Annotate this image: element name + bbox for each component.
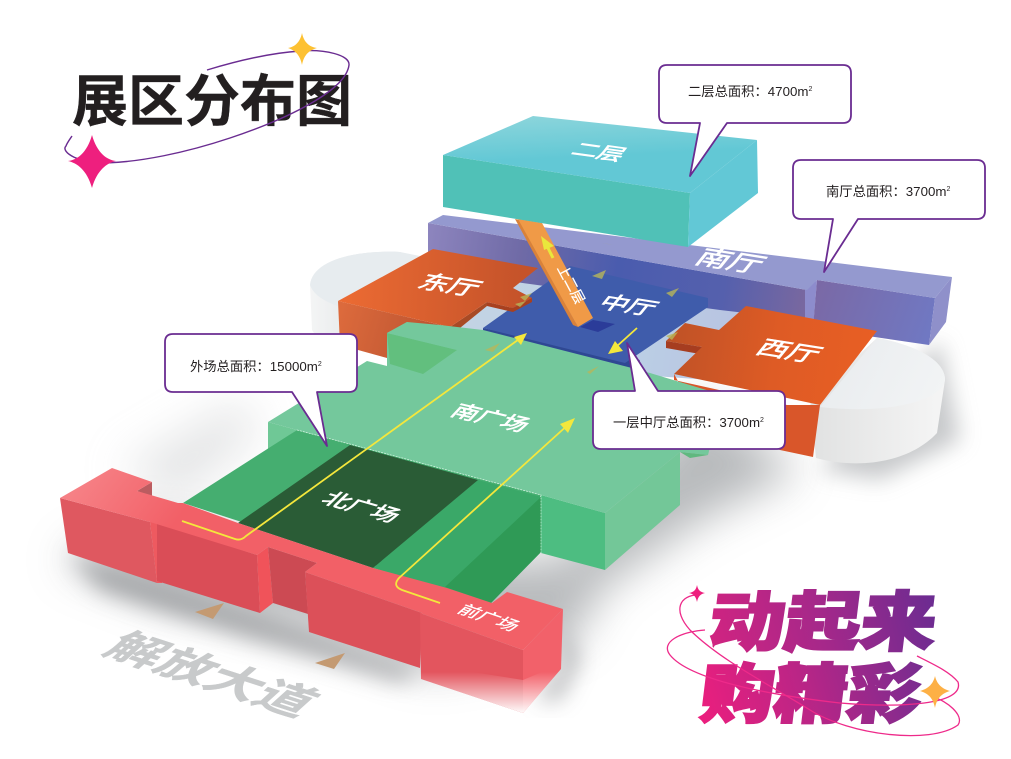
ramp arrow (541, 236, 554, 258)
panel: west hall 西厅 (666, 306, 877, 457)
route to south plaza (396, 423, 570, 603)
panel: red front wall 前广场 (60, 468, 563, 713)
callout: 南厅: 南厅总面积：3700m (826, 184, 946, 199)
callout: 一层中厅: 一层中厅总面积：3700m (613, 415, 760, 430)
callout: 外场: 2 (318, 361, 322, 368)
title 展区分布图: 展区分布图 (72, 57, 352, 138)
slogan line 1: 动起来 (705, 571, 943, 664)
recessed block (387, 333, 457, 374)
route to central hall (182, 337, 522, 540)
label: 中厅: 中厅 (593, 288, 665, 321)
callout: 外场 (165, 334, 357, 446)
callout: 南厅 (793, 160, 985, 272)
entrance markers on road (195, 603, 345, 669)
callout: 一层中厅: 2 (760, 417, 764, 424)
panel: north plaza 北广场 (183, 430, 541, 603)
label: 西厅: 西厅 (750, 331, 831, 368)
route out of central hall (616, 328, 637, 347)
escalator ramp 上二层 (515, 219, 593, 327)
road label 解放大道: 解放大道 (91, 619, 337, 727)
panel: east hall 东厅 (338, 249, 538, 360)
floor between halls (440, 268, 800, 385)
icon: pink sparkle (68, 135, 116, 188)
icon: pink sparkle (689, 585, 705, 602)
callout: 一层中厅 (593, 343, 785, 449)
panel: south plaza 南广场 (268, 322, 723, 570)
title orbit decoration (65, 33, 349, 188)
label: 上二层: 上二层 (553, 261, 590, 307)
label: 东厅: 东厅 (412, 266, 491, 302)
label: 前广场: 前广场 (452, 599, 527, 635)
callout: 外场: 外场总面积：15000m (190, 359, 318, 374)
icon: yellow sparkle (288, 33, 317, 65)
callout: 二层: 二层总面积：4700m (688, 84, 808, 99)
panel: south hall 南厅 (428, 215, 952, 345)
label: 南广场: 南广场 (445, 397, 539, 437)
soft ground shadows (0, 340, 1011, 759)
panel: second floor 二层 (443, 116, 758, 247)
small direction markers (485, 243, 679, 374)
label: 南厅: 南厅 (688, 240, 775, 279)
white capsule base (310, 252, 945, 463)
panel: central hall 中厅 (483, 266, 708, 372)
callout: 南厅: 2 (946, 186, 950, 193)
stair well (580, 320, 615, 332)
callout: 二层: 2 (808, 86, 812, 93)
yellow route lines (182, 328, 637, 603)
label: 二层: 二层 (566, 136, 634, 166)
slogan orbits (667, 595, 959, 736)
icon: orange sparkle (920, 676, 950, 708)
slogan line 2: 购精彩 (696, 643, 928, 736)
label: 北广场: 北广场 (315, 485, 410, 527)
callout: 二层 (659, 65, 851, 176)
slogan 动起来购精彩 (667, 571, 959, 736)
